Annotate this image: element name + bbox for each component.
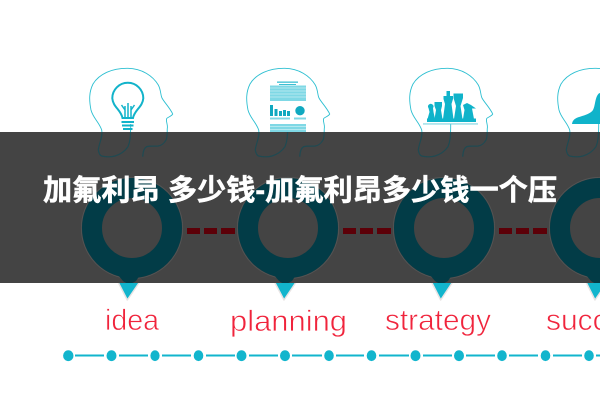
ring: strategy xyxy=(393,177,495,284)
head: planning with document xyxy=(246,68,330,132)
dark banner xyxy=(0,132,600,283)
pointer tips xyxy=(117,280,600,300)
dashed connectors xyxy=(187,228,547,234)
icon: light bulb xyxy=(112,83,143,129)
icon: document with chart xyxy=(270,82,306,133)
ring: planning xyxy=(237,177,339,284)
step labels xyxy=(105,304,600,338)
icon: chess pieces xyxy=(423,91,478,124)
label: strategy: strategy xyxy=(385,304,491,337)
ring: idea xyxy=(81,177,183,284)
head outlines inside banner xyxy=(98,132,600,158)
ring: success xyxy=(549,177,600,284)
label: planning: planning xyxy=(230,305,347,338)
icon: hand xyxy=(572,93,600,124)
label: idea: idea xyxy=(105,304,159,337)
head: idea with light bulb xyxy=(89,68,174,132)
rings with pointers xyxy=(81,177,600,284)
title: 加氟利昂 多少钱-加氟利昂多少钱一个压 xyxy=(43,174,557,207)
head: strategy with chess pieces xyxy=(409,68,494,132)
timeline of dots xyxy=(63,350,600,361)
head: success with hand xyxy=(557,68,600,132)
